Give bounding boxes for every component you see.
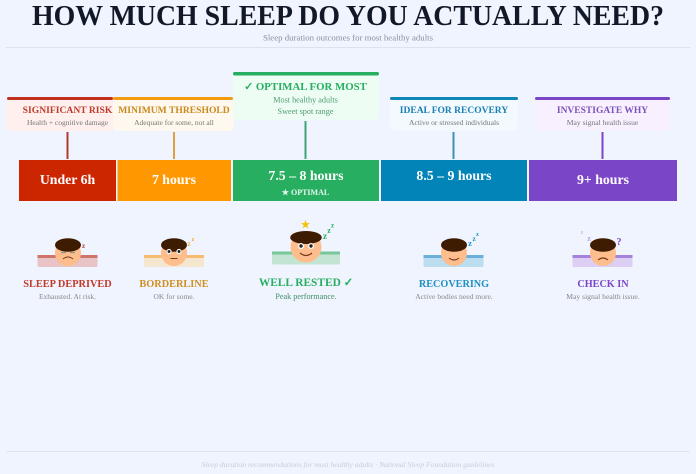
icon: check in face <box>572 230 632 267</box>
callout: optimal for most: ✓ OPTIMAL FOR MOST <box>244 81 368 93</box>
callout: optimal for most: Sweet spot range <box>278 107 334 116</box>
icon: well rested face: z <box>331 222 334 230</box>
callout: ideal for recovery: IDEAL FOR RECOVERY <box>400 106 508 116</box>
icon: well rested face: z <box>327 226 331 235</box>
callout: optimal for most <box>233 72 379 120</box>
connector: optimal <box>304 121 306 159</box>
label: check in: CHECK IN <box>577 279 629 290</box>
callout: significant risk: Health + cognitive damage <box>27 118 109 127</box>
segment: under 6h: Under 6h <box>40 172 95 187</box>
label: borderline <box>139 279 209 301</box>
label: sleep deprived: SLEEP DEPRIVED <box>23 279 112 290</box>
connector: investigate <box>602 132 604 159</box>
title: HOW MUCH SLEEP DO YOU ACTUALLY NEED? <box>32 0 664 32</box>
connector: recovery <box>452 132 454 159</box>
callout: optimal for most: Most healthy adults <box>273 96 338 104</box>
segment: 7 hours: 7 hours <box>152 172 197 187</box>
icon: recovering face: z <box>468 239 472 248</box>
segment: 9+ hours <box>529 160 677 201</box>
connector: significant risk <box>66 132 68 159</box>
icon: borderline face: z <box>192 237 195 243</box>
label: borderline: OK for some. <box>153 292 195 301</box>
icon: recovering face: z <box>476 232 479 238</box>
callout: investigate why <box>535 97 670 131</box>
connector: minimum threshold <box>173 132 175 159</box>
callout: ideal for recovery: Active or stressed individuals <box>409 118 499 127</box>
callout: significant risk <box>7 97 113 131</box>
footer note: Sleep duration recommendations for most healthy adults · National Sleep Foundation guidelines <box>202 460 494 469</box>
icon: well rested face <box>272 218 340 264</box>
subtitle: Sleep duration outcomes for most healthy adults <box>263 32 434 42</box>
segment: 8.5 to 9 hours <box>381 160 527 201</box>
label: borderline: BORDERLINE <box>139 279 209 290</box>
icon: recovering face <box>424 232 484 267</box>
icon: borderline face <box>144 237 204 267</box>
callout: investigate why: May signal health issue <box>567 118 639 127</box>
label: sleep deprived <box>23 279 112 301</box>
icon: borderline face: z <box>187 240 191 248</box>
label: well rested: Peak performance. <box>275 292 337 301</box>
segment: 7.5 to 8 hours: ★ OPTIMAL <box>282 188 329 197</box>
segment: 7.5 to 8 hours <box>233 160 379 201</box>
icon: sleep deprived face: z <box>82 242 85 250</box>
label: well rested: WELL RESTED ✓ <box>259 277 353 289</box>
icon: check in face: z <box>581 230 584 236</box>
label: check in <box>566 279 640 301</box>
callout: ideal for recovery <box>390 97 518 131</box>
label: recovering: Active bodies need more. <box>415 292 493 301</box>
callout: minimum threshold <box>113 97 234 131</box>
callout: investigate why: INVESTIGATE WHY <box>557 106 648 116</box>
icon: well rested face: ★ <box>300 218 311 232</box>
label: sleep deprived: Exhausted. At risk. <box>39 292 96 301</box>
segment: 9+ hours: 9+ hours <box>577 172 630 187</box>
icon: recovering face: z <box>472 235 476 243</box>
icon: check in face: z <box>587 234 591 243</box>
segment: 8.5 to 9 hours: 8.5 – 9 hours <box>416 168 492 183</box>
segment: 7 hours <box>118 160 231 201</box>
label: recovering <box>415 279 493 301</box>
segment: under 6h <box>19 160 116 201</box>
callout: significant risk: SIGNIFICANT RISK <box>23 105 113 116</box>
callout: minimum threshold: MINIMUM THRESHOLD <box>118 105 230 116</box>
callout: minimum threshold: Adequate for some, not all <box>134 118 214 127</box>
icon: sleep deprived face <box>38 238 98 267</box>
icon: check in face: ? <box>616 237 622 248</box>
label: well rested <box>259 277 353 301</box>
label: check in: May signal health issue. <box>566 292 640 301</box>
icon: well rested face: z <box>323 231 327 241</box>
label: recovering: RECOVERING <box>419 279 489 290</box>
segment: 7.5 to 8 hours: 7.5 – 8 hours <box>268 168 344 183</box>
